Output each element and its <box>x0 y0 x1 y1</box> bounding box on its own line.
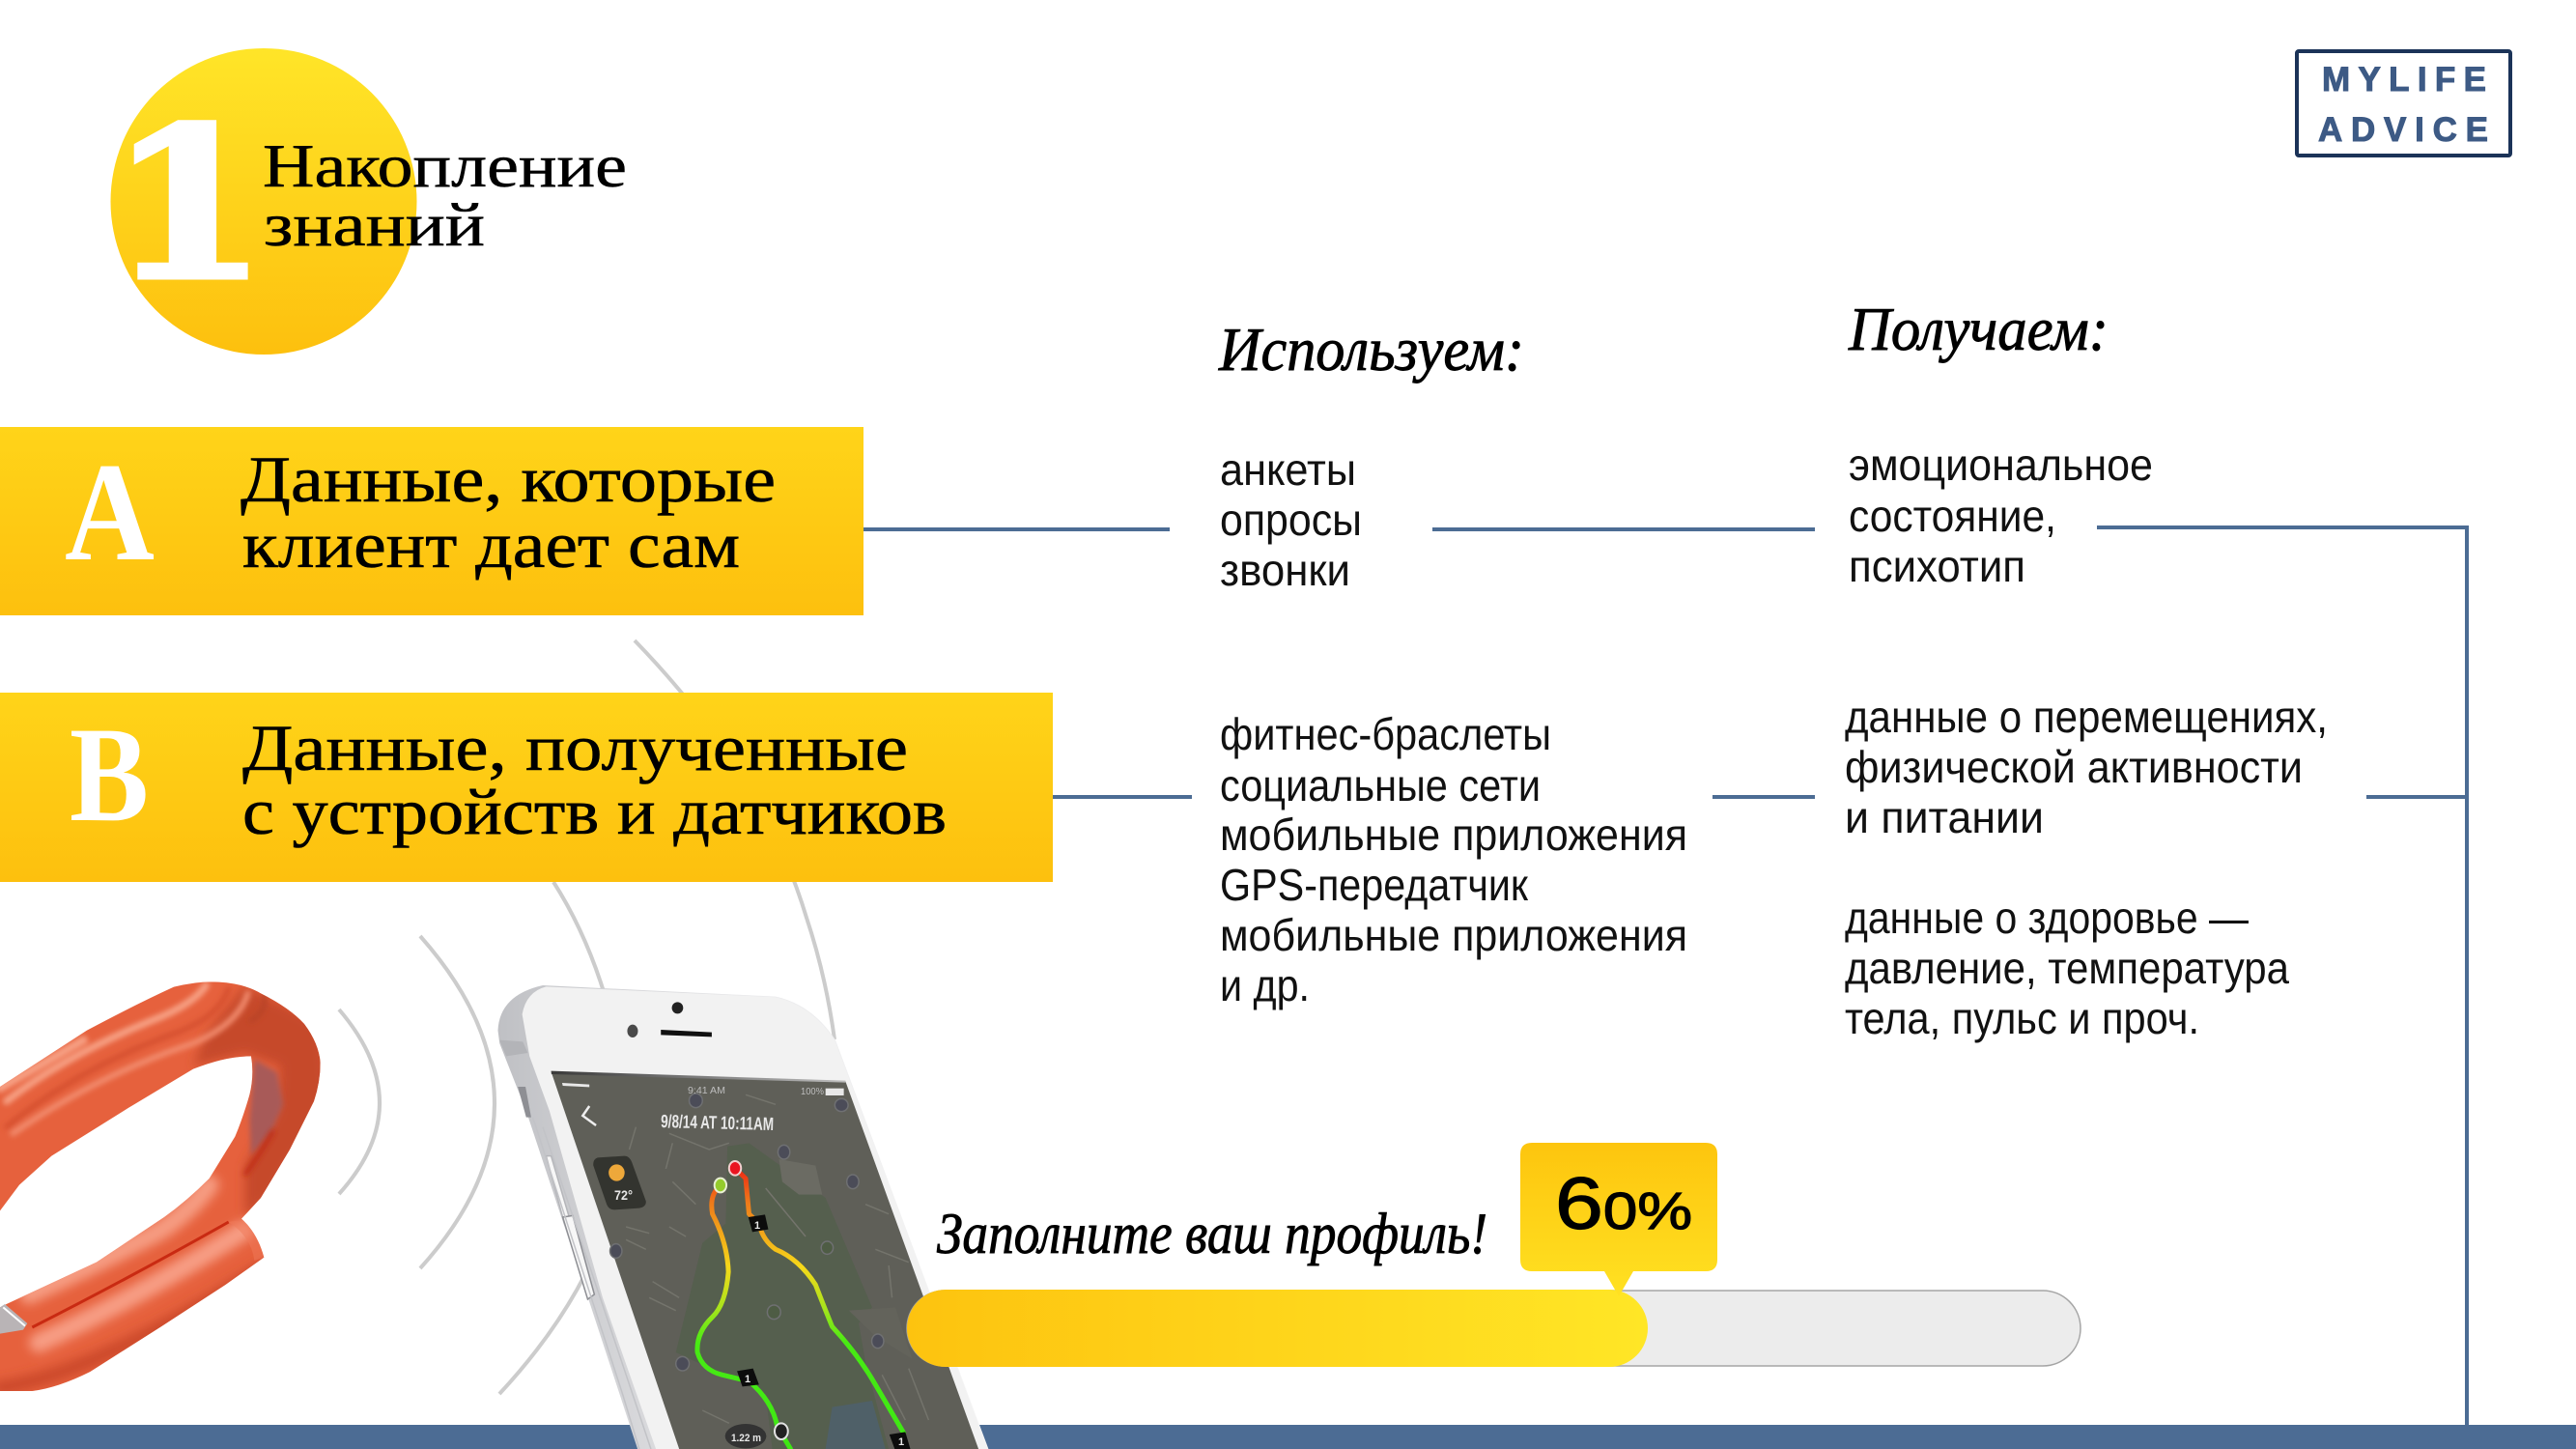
connector lines <box>863 527 2467 1425</box>
track <box>907 1291 2081 1366</box>
text: B gets: тела, пульс и проч. <box>1845 993 2199 1043</box>
band base <box>0 981 321 1391</box>
phone front face <box>523 986 988 1449</box>
weather badge <box>593 1156 646 1209</box>
phone screen labels: 72° <box>614 1187 633 1203</box>
earpiece and camera <box>672 1002 683 1013</box>
text: A gets: психотип <box>1849 541 2025 591</box>
text: B gets: и питании <box>1845 792 2044 842</box>
text: A gets <box>1849 440 2153 591</box>
text: A gets: состояние, <box>1849 491 2056 541</box>
text: B uses <box>1220 709 1687 1010</box>
fill <box>907 1290 1648 1367</box>
phone screen labels: 1 <box>898 1436 904 1448</box>
phone screen labels: 100% <box>801 1087 824 1097</box>
text: B uses: мобильные приложения <box>1220 810 1687 860</box>
text: B gets: данные о перемещениях, <box>1845 692 2328 742</box>
text: A uses: анкеты <box>1220 444 1356 495</box>
text: B gets <box>1845 692 2328 1043</box>
screen <box>552 1071 978 1449</box>
heading B: с устройств и датчиков <box>242 775 947 848</box>
text: A uses <box>1220 444 1362 595</box>
panel: B <box>0 693 1053 882</box>
back arrow <box>582 1106 596 1125</box>
heading A: Данные, которые <box>241 442 776 516</box>
title <box>263 131 627 259</box>
callout: 60% <box>1520 1143 1717 1296</box>
title: Накопление <box>263 131 627 200</box>
route markers <box>729 1161 741 1176</box>
heading B: Данные, полученные <box>242 711 908 784</box>
letter B: B <box>70 699 149 850</box>
text: B gets: данные о здоровье — <box>1845 893 2249 943</box>
icon: fitness band <box>0 981 321 1391</box>
phone side details <box>499 1040 527 1056</box>
title: знаний <box>264 190 485 259</box>
panel: A <box>0 427 863 615</box>
status icons <box>826 1089 844 1095</box>
text: B uses: мобильные приложения <box>1220 910 1687 960</box>
phone screen labels <box>614 1086 904 1448</box>
signal arcs <box>339 640 835 1394</box>
progress bar <box>907 1290 2081 1367</box>
callout: 60%: 60% <box>1555 1163 1692 1245</box>
footer band <box>0 1425 2576 1449</box>
logo <box>2297 51 2510 156</box>
text: B uses: GPS-передатчик <box>1220 860 1529 910</box>
phone screen labels: 9/8/14 AT 10:11AM <box>661 1112 774 1135</box>
icon: phone <box>497 985 988 1449</box>
routes <box>697 1169 904 1449</box>
circle with number 1 <box>108 48 417 355</box>
band top right shade <box>193 985 328 1217</box>
text: B uses: и др. <box>1220 960 1310 1010</box>
cta text: Заполните ваш профиль! <box>937 1202 1487 1265</box>
text: A uses: звонки <box>1220 545 1350 595</box>
text: A gets: эмоциональное <box>1849 440 2153 490</box>
heading A: клиент дает сам <box>242 508 740 582</box>
heading: Используем: Используем: <box>1218 315 1524 384</box>
circle with number 1: 1 <box>108 81 269 327</box>
band metal clip <box>0 1304 27 1334</box>
phone screen labels: 1 <box>745 1374 750 1385</box>
phone screen labels: 9:41 AM <box>688 1086 725 1096</box>
band lower highlights <box>0 1185 268 1388</box>
band ridges <box>0 985 265 1133</box>
logo: MYLIFE <box>2322 61 2486 99</box>
text: A uses: опросы <box>1220 495 1362 545</box>
phone screen labels: 1 <box>754 1220 760 1232</box>
text: B uses: фитнес-браслеты <box>1220 709 1551 759</box>
text: B gets: давление, температура <box>1845 943 2289 993</box>
heading: Получаем: Получаем: <box>1848 295 2109 363</box>
band inner shadow <box>249 1060 283 1156</box>
phone screen labels: 1.22 m <box>731 1433 761 1444</box>
heading B <box>242 711 947 848</box>
map road lines <box>626 1094 928 1423</box>
phone body <box>497 985 988 1449</box>
band flap groove <box>32 1222 229 1327</box>
map pins <box>610 1094 884 1371</box>
text: B uses: социальные сети <box>1220 760 1541 810</box>
letter A: A <box>65 434 155 590</box>
logo: ADVICE <box>2318 111 2488 149</box>
heading A <box>241 442 776 582</box>
map park area <box>676 1143 889 1449</box>
text: B gets: физической активности <box>1845 742 2303 792</box>
